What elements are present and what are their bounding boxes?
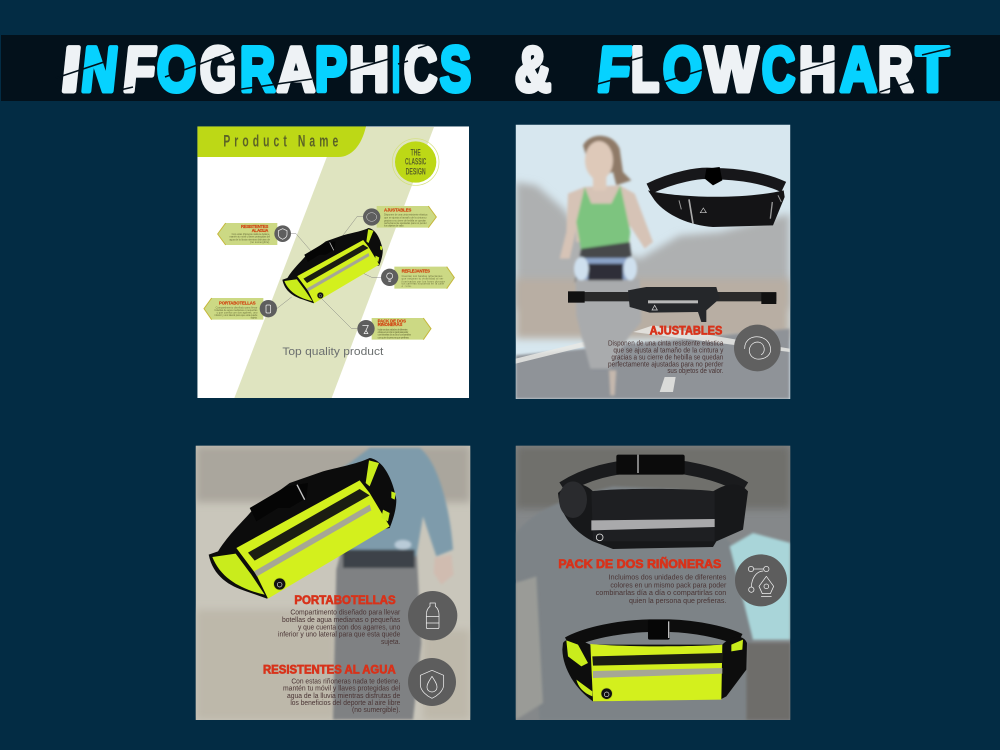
heading: ajustables: AJUSTABLES — [650, 324, 723, 337]
callout: portabotellas: PORTABOTELLAS — [219, 301, 256, 306]
callout: portabotellas: botellas de agua medianas o pequeñas — [215, 309, 258, 312]
title: Infographics — [59, 35, 471, 105]
body text: resistentes al agua: (no sumergible). — [352, 707, 400, 714]
diagonal band — [234, 127, 434, 398]
icon: vector pen tool — [735, 554, 787, 606]
body text: resistentes al agua: Con estas riñoneras nada te detiene, — [291, 678, 400, 685]
body text: resistentes al agua — [283, 678, 401, 714]
body text: portabotellas: botellas de agua medianas o pequeñas — [282, 617, 401, 624]
title: Flowchart: H — [799, 35, 836, 105]
product name header: Product Name — [223, 131, 338, 150]
body text: colores en un mismo pack para poder — [610, 582, 727, 589]
top quality product: Top quality product — [282, 346, 383, 358]
icon: water bottle — [408, 591, 457, 640]
lime waist bag — [562, 620, 747, 701]
body text: combinarlas día a día o compartirlas con — [596, 590, 726, 597]
callout: portabotellas — [204, 298, 277, 320]
heading: pack de dos rinoneras: PACK DE DOS RIÑONERAS — [558, 558, 722, 571]
body text: portabotellas — [278, 610, 401, 646]
body text: perfectamente ajustadas para no perder — [608, 361, 724, 368]
title: Infographics: I — [392, 35, 400, 105]
body text: resistentes al agua: los beneficios del deporte al aire libre — [290, 700, 400, 707]
callout: portabotellas: Compartimento diseñado para llevar — [216, 306, 258, 309]
callout: portabotellas: inferior y uno lateral para que esta quede — [215, 314, 258, 317]
callout: portabotellas: y que cuenta con dos agarres, uno — [217, 311, 258, 314]
title: Infographics: N — [79, 35, 121, 105]
callout: ajustables: perfectamente ajustadas para no perder — [384, 222, 427, 225]
title: Flowchart: O — [663, 35, 702, 105]
callout: pack de dos rinoneras: colores en un mismo pack para poder — [378, 331, 409, 334]
callout: portabotellas: sujeta. — [251, 316, 258, 319]
callout: ajustables: sus objetos de valor. — [384, 224, 404, 227]
title: Flowchart: C — [762, 35, 795, 105]
title: Infographics: C — [404, 35, 437, 105]
icon: elastic spiral — [734, 325, 781, 371]
black waist bag — [648, 167, 785, 227]
callout: resistentes al agua: RESISTENTES — [241, 224, 268, 229]
callout: resistentes al agua: mantén tu móvil y llaves protegidas del — [229, 236, 270, 239]
callout: ajustables: AJUSTABLES — [384, 208, 411, 213]
title banner — [1, 35, 1000, 105]
title: Flowchart: L — [631, 35, 659, 105]
body text: que se ajusta al tamaño de la cintura y — [613, 348, 724, 355]
callout: resistentes al agua: AL AGUA — [252, 228, 269, 233]
callout: pack de dos rinoneras — [357, 318, 431, 340]
runner — [560, 136, 653, 395]
waist bag image — [282, 228, 383, 303]
callout: reflejantes: o ruta. — [402, 285, 412, 288]
callout: ajustables: Disponen de una cinta resistente elástica — [384, 214, 428, 217]
body text: gracias a su cierre de hebilla se quedan — [611, 355, 723, 362]
title: Infographics: A — [277, 35, 315, 105]
body text — [608, 341, 724, 375]
classic design badge: DESIGN — [406, 166, 426, 176]
classic design badge: THE — [411, 147, 421, 157]
callout: ajustables: gracias a su cierre de hebilla se quedan — [384, 220, 427, 223]
title: Infographics: F — [121, 35, 159, 105]
panel: product overview diagram — [197, 126, 469, 398]
icon: water-resistant shield — [408, 658, 456, 706]
body text: portabotellas: Compartimento diseñado para llevar — [290, 610, 401, 617]
callout: reflejantes: Cuentan con bandas reflectantes — [402, 275, 443, 278]
title: Infographics: I — [59, 35, 84, 105]
callout: resistentes al agua: agua de la lluvia mientras disfrutas de — [229, 238, 271, 241]
photo background — [196, 446, 470, 720]
callout: ajustables — [363, 206, 436, 228]
photo background — [516, 446, 790, 720]
callout: pack de dos rinoneras: combinarlas día a día o compartirlas — [378, 334, 412, 337]
callout: pack de dos rinoneras: Incluimos dos unidades de diferentes — [378, 328, 408, 331]
heading: portabotellas: PORTABOTELLAS — [294, 594, 396, 607]
title: Flowchart: T — [916, 35, 949, 105]
title: Infographics: S — [440, 35, 471, 105]
heading: resistentes al agua: RESISTENTES AL AGUA — [263, 664, 396, 677]
title: Infographics: P — [315, 35, 347, 105]
body text — [596, 575, 727, 605]
panel: pack de dos rinoneras — [516, 446, 790, 720]
flat belt — [568, 287, 776, 322]
callout: resistentes al agua: (no sumergible). — [250, 241, 270, 244]
title: ampersand: & — [515, 35, 551, 105]
classic design badge: CLASSIC — [405, 157, 427, 167]
title: Flowchart: R — [878, 35, 913, 105]
title: Infographics: H — [349, 35, 389, 105]
body text: portabotellas: inferior y uno lateral para que esta quede — [278, 632, 400, 639]
body text: portabotellas: sujeta. — [381, 639, 400, 646]
lime waist bag — [209, 458, 396, 599]
panel: ajustables, runner photo — [516, 125, 790, 399]
black waist bag — [558, 455, 748, 549]
callout: ajustables: que se ajusta al tamaño de la cintura y — [384, 217, 427, 220]
body text: Disponen de una cinta resistente elástica — [608, 341, 723, 348]
photo background — [516, 125, 790, 399]
body text: portabotellas: y que cuenta con dos agarres, uno — [298, 624, 400, 631]
classic design badge — [392, 139, 439, 185]
callout: reflejantes — [381, 267, 454, 289]
title: Infographics: G — [200, 35, 236, 105]
callout: pack de dos rinoneras: PACK DE DOS — [378, 318, 406, 323]
callout: resistentes al agua — [218, 223, 291, 245]
title: Flowchart: F — [595, 35, 634, 105]
callout: reflejantes: que mejoran tu visibilidad al ser — [402, 278, 444, 281]
title: Infographics: O — [157, 35, 196, 105]
title: Flowchart — [595, 35, 949, 105]
callout: pack de dos rinoneras: RIÑONERAS — [378, 322, 402, 327]
body text: quien la persona que prefieras. — [629, 598, 726, 605]
body text: sus objetos de valor. — [667, 368, 723, 375]
title: Flowchart: A — [840, 35, 877, 105]
callout: pack de dos rinoneras: con quien la persona que prefieras. — [378, 336, 410, 339]
runner — [333, 448, 454, 720]
title: Infographics: R — [240, 35, 275, 105]
callout: reflejantes: tus carreras nocturnas en la calle — [402, 283, 445, 286]
panel: portabotellas and resistentes al agua — [196, 446, 470, 720]
callout: reflejantes: iluminados por los faros durante — [402, 280, 446, 283]
callout: resistentes al agua: Con estas riñoneras nada te detiene, — [232, 233, 270, 236]
connector lines — [277, 216, 381, 329]
callout: reflejantes: REFLEJANTES — [402, 269, 430, 274]
body text: resistentes al agua: agua de la lluvia mientras disfrutas de — [287, 693, 400, 700]
title: Flowchart: W — [705, 35, 758, 105]
body text: Incluimos dos unidades de diferentes — [609, 575, 727, 582]
body text: resistentes al agua: mantén tu móvil y llaves protegidas del — [283, 686, 401, 693]
product name header — [197, 126, 366, 157]
